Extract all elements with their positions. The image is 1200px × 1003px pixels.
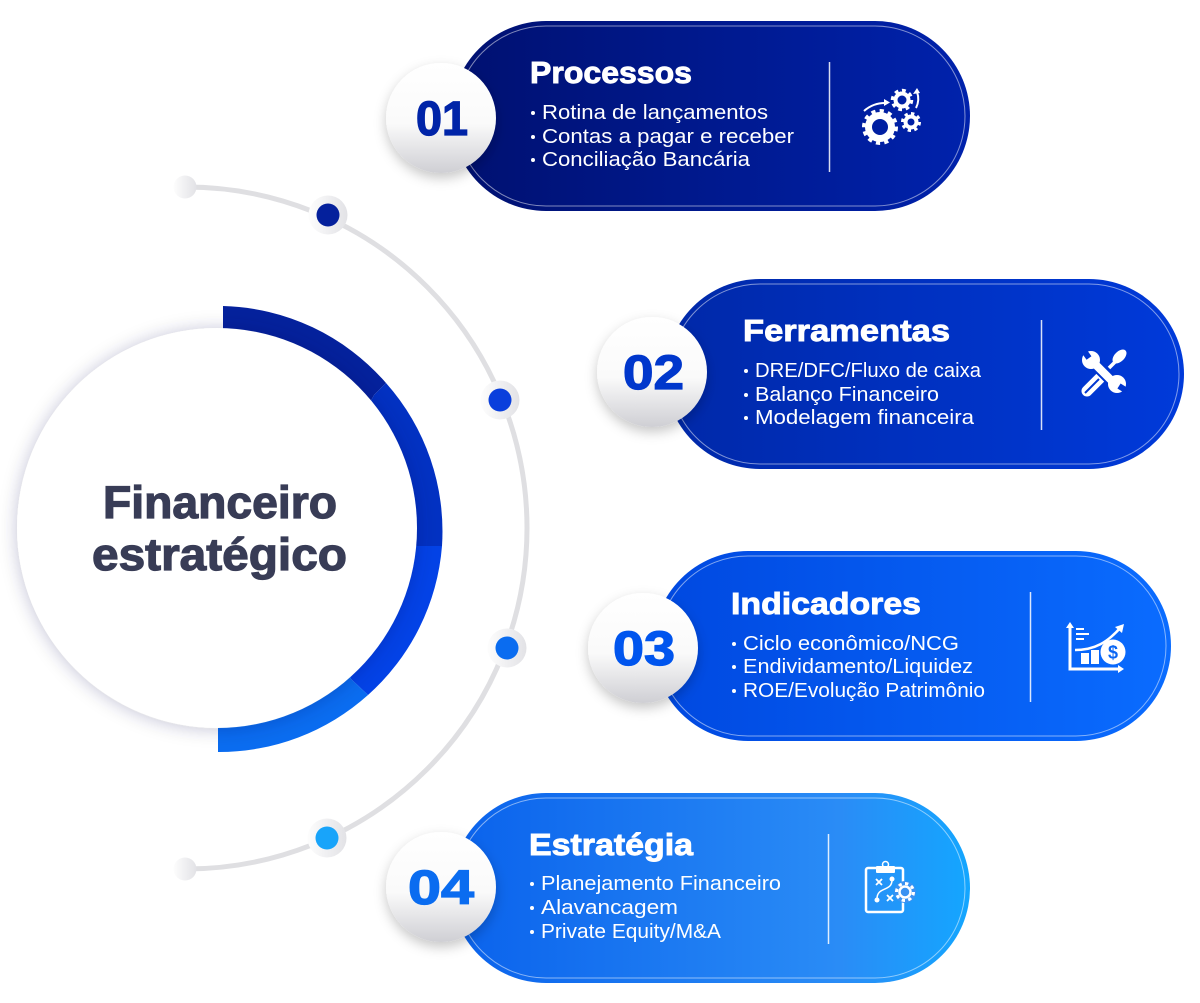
central circle bbox=[17, 328, 417, 728]
badge 02: 02 bbox=[623, 347, 684, 400]
heading: Indicadores bbox=[731, 586, 921, 621]
badge 04: 04 bbox=[408, 862, 474, 915]
central title: Financeiro bbox=[103, 477, 337, 528]
panel: Ferramentas bbox=[597, 279, 1184, 469]
node 1 bbox=[308, 196, 348, 234]
icon: gears bbox=[864, 88, 920, 142]
icon: tools bbox=[1082, 347, 1129, 393]
central ring bbox=[218, 306, 442, 752]
badge 04 bbox=[386, 832, 496, 942]
icon: growth chart bbox=[1066, 622, 1126, 673]
node 3 bbox=[488, 628, 526, 668]
badge 02 bbox=[597, 317, 707, 427]
list: Balanço Financeiro bbox=[755, 383, 939, 406]
badge 01 bbox=[386, 63, 496, 173]
node 4 bbox=[308, 818, 346, 858]
panel: Processos bbox=[386, 21, 970, 211]
panel: Indicadores bbox=[588, 551, 1171, 741]
badge 01: 01 bbox=[416, 93, 468, 146]
heading: Ferramentas bbox=[743, 313, 950, 348]
list: Conciliação Bancária bbox=[542, 148, 751, 171]
list: Contas a pagar e receber bbox=[542, 125, 794, 148]
list: Planejamento Financeiro bbox=[541, 872, 781, 895]
heading: Estratégia bbox=[529, 827, 694, 862]
list bbox=[530, 872, 781, 943]
list bbox=[732, 632, 985, 702]
heading: Processos bbox=[530, 55, 692, 90]
list: Alavancagem bbox=[541, 896, 678, 919]
badge 03 bbox=[588, 593, 698, 703]
icon: strategy clipboard bbox=[866, 862, 916, 912]
list: Ciclo econômico/NCG bbox=[743, 632, 959, 655]
outer arc bbox=[186, 187, 527, 869]
badge 03: 03 bbox=[613, 623, 675, 676]
list bbox=[744, 359, 982, 429]
list: ROE/Evolução Patrimônio bbox=[743, 679, 985, 702]
icon: growth chart: $ bbox=[1108, 642, 1118, 662]
central title: estratégico bbox=[92, 529, 347, 580]
list: Private Equity/M&A bbox=[541, 920, 721, 943]
list: Endividamento/Liquidez bbox=[743, 655, 973, 678]
list: DRE/DFC/Fluxo de caixa bbox=[755, 359, 982, 382]
arc end dot: top bbox=[174, 176, 196, 198]
list bbox=[531, 101, 794, 171]
list: Rotina de lançamentos bbox=[542, 101, 768, 124]
list: Modelagem financeira bbox=[755, 406, 975, 429]
panel: Estratégia bbox=[386, 793, 970, 983]
node 2 bbox=[480, 380, 520, 420]
arc end dot: bottom bbox=[174, 858, 196, 880]
central title bbox=[92, 477, 347, 580]
